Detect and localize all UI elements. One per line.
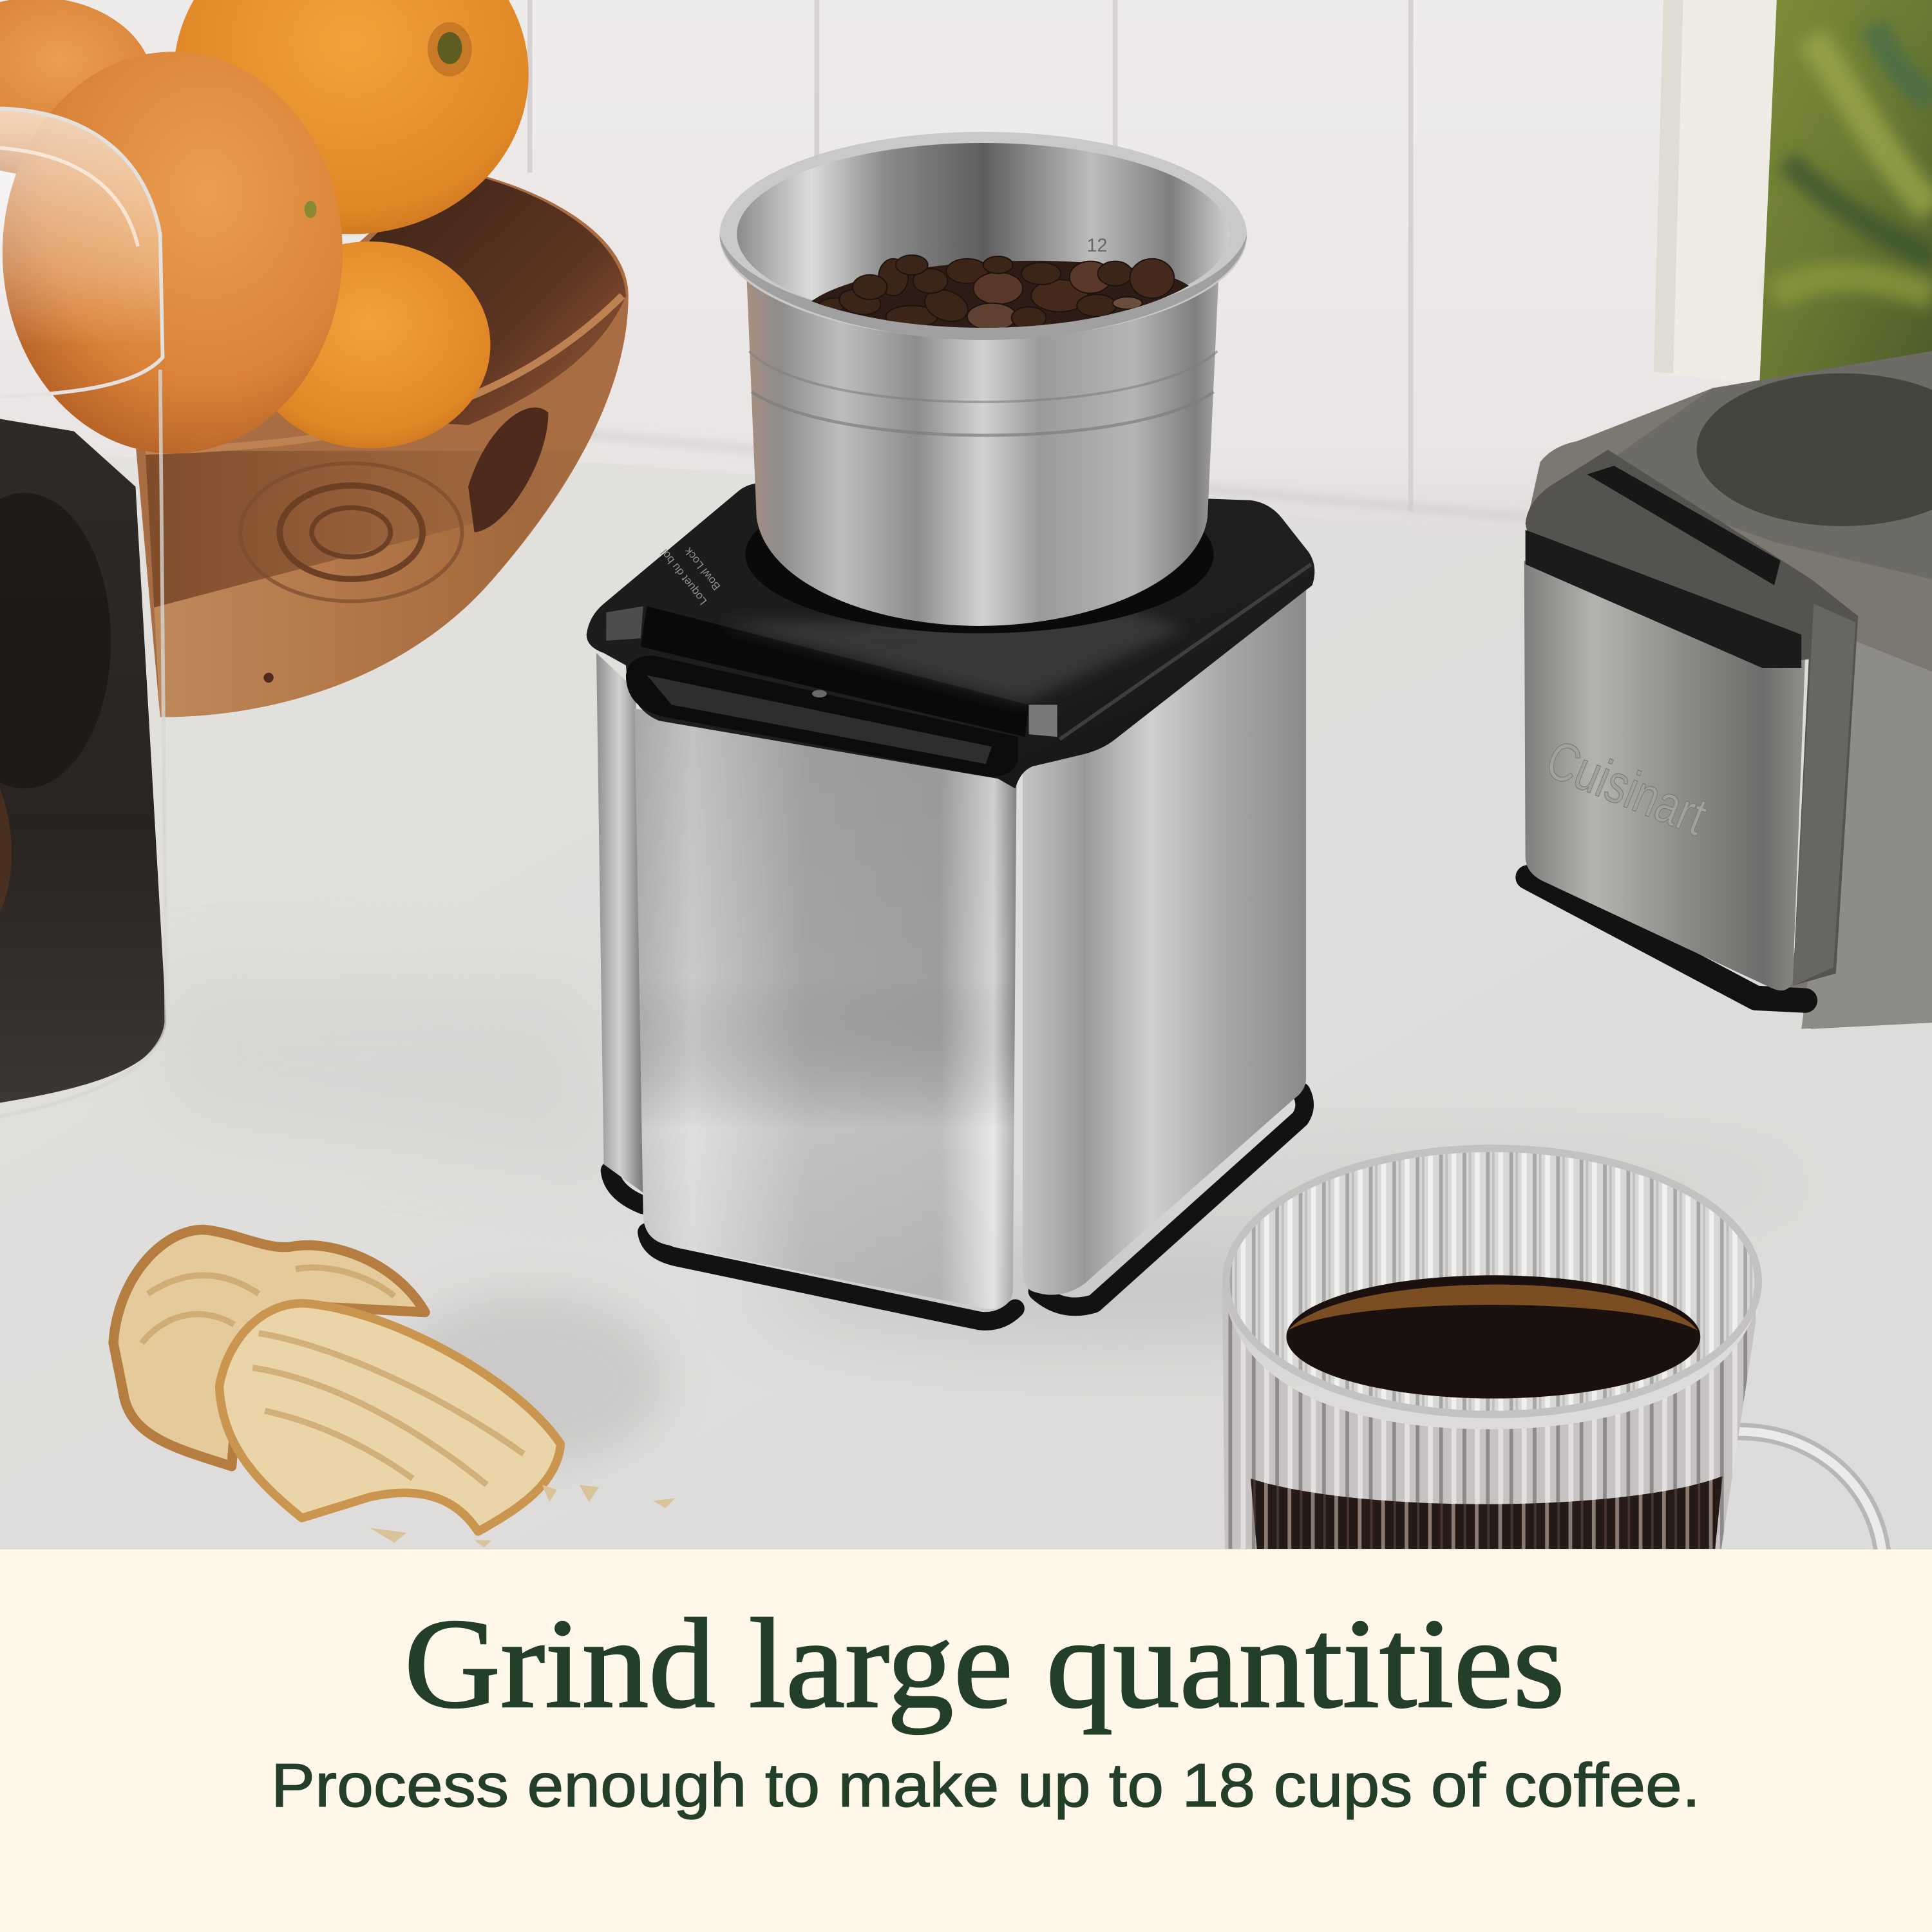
coffee side through glass xyxy=(1251,1476,1723,1549)
countertop xyxy=(0,456,1932,1553)
mug body xyxy=(1222,1282,1762,1549)
bowl lock marking: Bowl Lock xyxy=(681,545,723,593)
mug handle xyxy=(1707,1432,1882,1555)
clear container xyxy=(1528,351,1932,1029)
cup well xyxy=(746,476,1214,633)
glass jar of ground coffee xyxy=(0,108,173,1116)
fill line mark: 12 xyxy=(1086,235,1107,256)
clear lid and latch xyxy=(1526,450,1858,986)
grinder lid xyxy=(587,482,1314,788)
picture frame and green artwork xyxy=(1654,0,1932,384)
main grinder xyxy=(587,132,1314,1321)
grinder left face xyxy=(634,708,1016,1309)
base trim xyxy=(1528,877,1805,1001)
caption band xyxy=(0,1549,1932,1932)
subheading: Process enough to make up to 18 cups of coffee. xyxy=(271,1751,1700,1820)
grinder base xyxy=(610,1092,1305,1321)
second grinder at right xyxy=(1524,351,1932,1029)
wall with tiles xyxy=(0,0,1932,554)
pastries xyxy=(113,1229,675,1548)
coffee beans xyxy=(811,254,1189,328)
soft shadows on counter xyxy=(160,973,1811,1466)
mug inner wall xyxy=(1224,1146,1761,1417)
grinder right face xyxy=(1023,585,1306,1295)
embossed brand name: Cuisinart xyxy=(1539,728,1715,847)
bowl lock marking: Loquet du bol xyxy=(658,547,709,608)
glass mug of coffee xyxy=(1222,1146,1882,1555)
stainless bowl xyxy=(719,132,1247,626)
grinder back-left strip xyxy=(596,653,643,1193)
stainless panel xyxy=(1524,561,1805,990)
oranges xyxy=(0,0,529,453)
wooden bowl xyxy=(135,166,629,727)
heading: Grind large quantities xyxy=(404,1593,1565,1735)
coffee surface xyxy=(1286,1275,1700,1399)
